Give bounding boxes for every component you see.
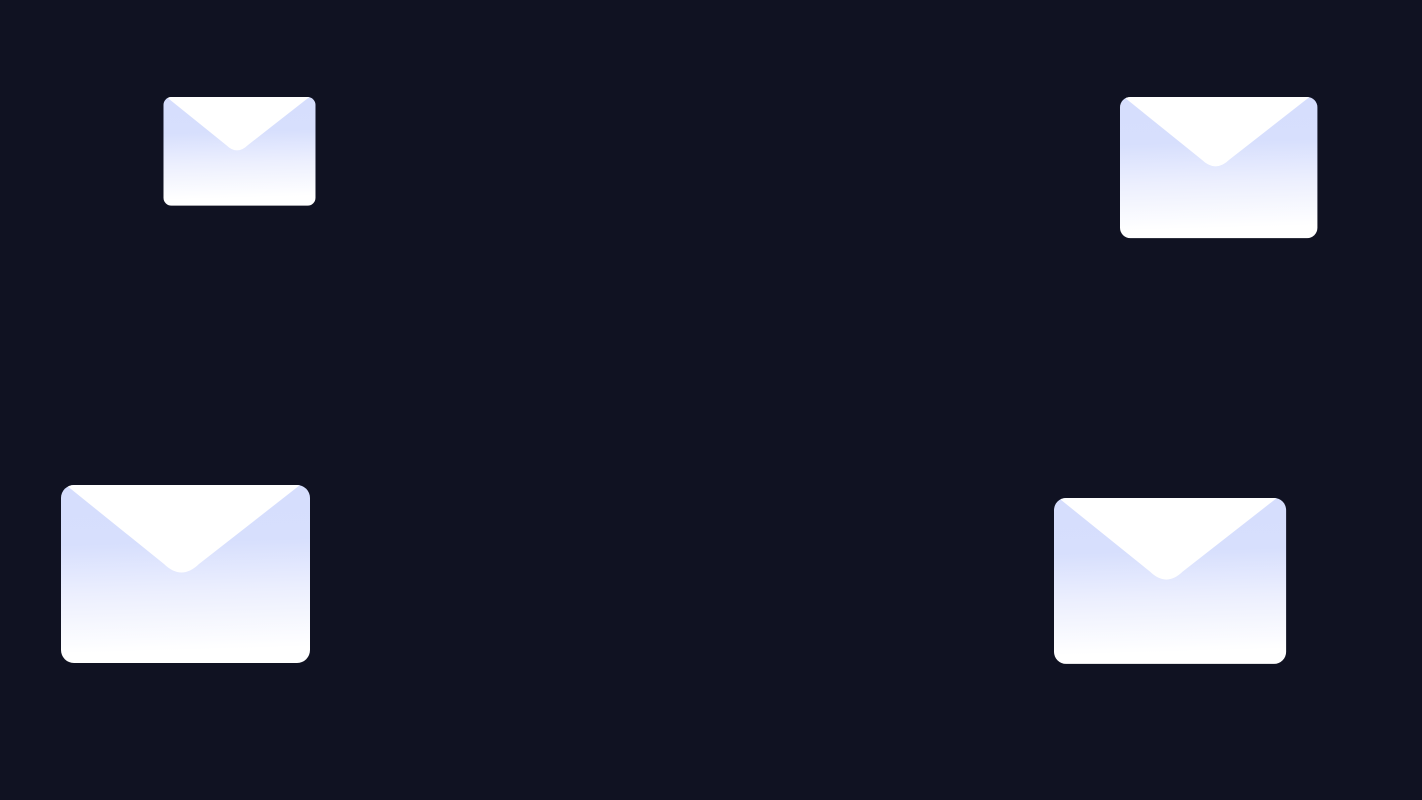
icon: envelope top right [1120,97,1317,238]
icon: envelope bottom left [61,485,310,663]
canvas: four envelope icons on a dark background [61,97,1318,664]
icon: envelope top left [164,97,315,206]
icon: envelope bottom right [1054,498,1286,664]
